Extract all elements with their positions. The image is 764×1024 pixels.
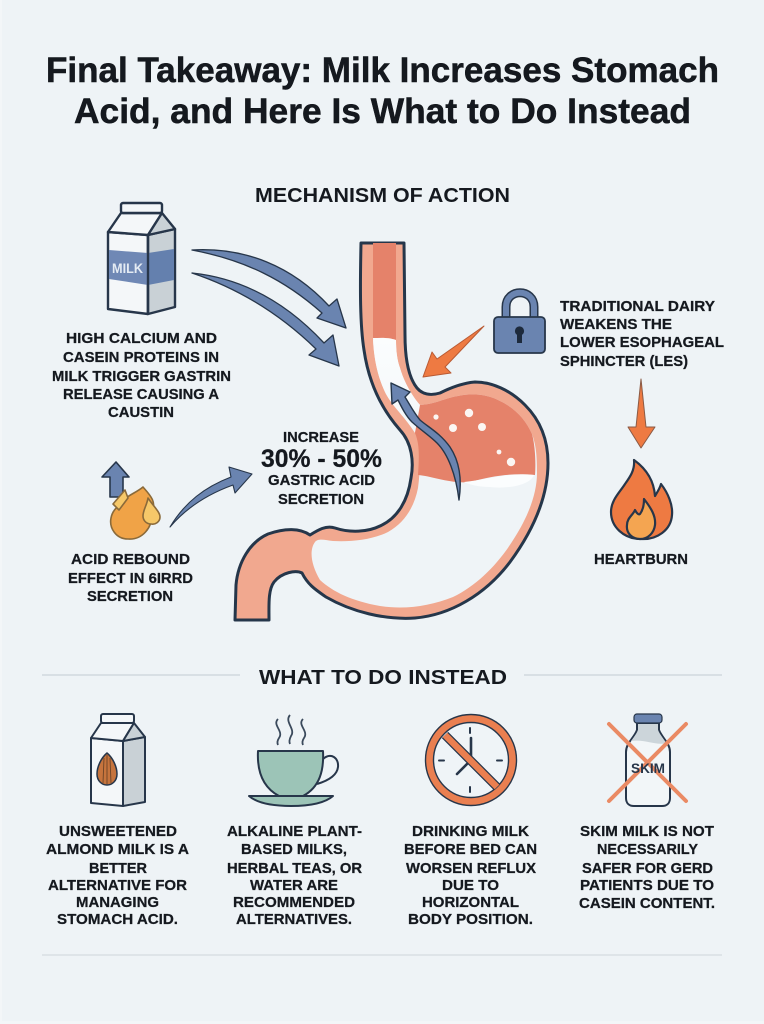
text: almond milk: ALTERNATIVE FOR: [48, 878, 187, 894]
arrow: acid rebound to increase: [170, 467, 252, 527]
icon: flame: [611, 460, 672, 539]
text: traditional dairy: WEAKENS THE: [560, 317, 672, 333]
icon: crossed-out skim bottle: [609, 714, 686, 806]
arrow: milk to stomach upper: [192, 250, 346, 328]
stomach lumen: [312, 340, 537, 608]
title: Acid, and Here Is What to Do Instead: [74, 92, 691, 131]
icon: crossed-out clock: [426, 714, 516, 806]
heading: mechanism of action: MECHANISM OF ACTION: [255, 185, 510, 207]
text: plant-based alternatives: RECOMMENDED: [233, 895, 355, 911]
text: traditional dairy: [560, 299, 724, 370]
text: traditional dairy: SPHINCTER (LES): [560, 354, 688, 370]
text: calcium and casein: CAUSTIN: [108, 405, 174, 421]
text: calcium and casein: HIGH CALCIUM AND: [66, 331, 217, 347]
icon: acid rebound: [102, 462, 160, 539]
text: acid rebound: [68, 552, 193, 605]
text: skim milk: NECESSARILY: [597, 842, 698, 858]
esophagus passage: [373, 338, 420, 433]
arrow: LES weakening: [423, 326, 484, 377]
text: calcium and casein: MILK TRIGGER GASTRIN: [52, 369, 231, 385]
gastric acid pool: [415, 394, 535, 482]
heading: what to do instead: WHAT TO DO INSTEAD: [259, 667, 507, 689]
arrow: to heartburn: [628, 379, 655, 448]
text: plant-based alternatives: BASED MILKS,: [241, 842, 347, 858]
text: drinking milk before bed: HORIZONTAL: [422, 895, 519, 911]
divider: what to do instead: [42, 674, 722, 676]
text: increase 30-50 percent: [261, 430, 382, 508]
text: plant-based alternatives: ALKALINE PLANT-: [227, 824, 362, 840]
text: skim milk: PATIENTS DUE TO: [580, 878, 714, 894]
title: [46, 51, 719, 131]
text: acid rebound: SECRETION: [87, 589, 173, 605]
text: drinking milk before bed: BEFORE BED CAN: [404, 842, 537, 858]
stomach diagram: [235, 243, 548, 620]
text: skim milk: CASEIN CONTENT.: [579, 896, 715, 912]
text: drinking milk before bed: DRINKING MILK: [412, 824, 529, 840]
text: plant-based alternatives: HERBAL TEAS, OR: [227, 861, 362, 877]
esophagus acid column: [373, 243, 396, 340]
text: drinking milk before bed: WORSEN REFLUX: [406, 861, 536, 877]
acid bubbles: [433, 409, 515, 466]
text: traditional dairy: LOWER ESOPHAGEAL: [560, 335, 724, 351]
text: plant-based alternatives: WATER ARE: [250, 878, 338, 894]
text: plant-based alternatives: ALTERNATIVES.: [236, 912, 352, 928]
icon: milk carton: MILK: [112, 261, 143, 276]
text: calcium and casein: [52, 331, 231, 421]
text: increase 30-50 percent: INCREASE: [283, 430, 359, 446]
text: skim milk: [579, 824, 715, 912]
title: Final Takeaway: Milk Increases Stomach: [46, 51, 719, 90]
text: almond milk: [46, 824, 189, 928]
icon: crossed-out skim bottle: SKIM: [631, 761, 665, 776]
text: drinking milk before bed: BODY POSITION.: [408, 912, 533, 928]
text: skim milk: SKIM MILK IS NOT: [580, 824, 714, 840]
text: traditional dairy: TRADITIONAL DAIRY: [560, 299, 715, 315]
text: almond milk: MANAGING: [76, 895, 159, 911]
icon: padlock: [494, 293, 545, 353]
text: increase 30-50 percent: SECRETION: [278, 492, 364, 508]
arrow: acid reflux: [391, 383, 460, 500]
icon: tea cup: [249, 715, 338, 806]
text: calcium and casein: RELEASE CAUSING A: [63, 387, 219, 403]
stomach wall: [235, 243, 548, 620]
icon: almond milk carton: [91, 714, 145, 806]
text: drinking milk before bed: DUE TO: [442, 878, 499, 894]
text: plant-based alternatives: [227, 824, 362, 928]
arrow: milk to stomach lower: [192, 273, 339, 366]
text: heartburn: HEARTBURN: [594, 552, 688, 568]
text: almond milk: STOMACH ACID.: [57, 912, 178, 928]
text: drinking milk before bed: [404, 824, 537, 928]
foam layer: [464, 474, 534, 488]
text: almond milk: UNSWEETENED: [59, 824, 177, 840]
text: increase 30-50 percent: GASTRIC ACID: [268, 473, 375, 489]
text: increase 30-50 percent: 30% - 50%: [261, 445, 382, 473]
text: almond milk: ALMOND MILK IS A: [46, 842, 189, 858]
text: almond milk: BETTER: [89, 861, 147, 877]
text: skim milk: SAFER FOR GERD: [582, 861, 713, 877]
text: acid rebound: ACID REBOUND: [71, 552, 190, 568]
icon: milk carton: [108, 203, 175, 314]
text: calcium and casein: CASEIN PROTEINS IN: [63, 350, 219, 366]
text: acid rebound: EFFECT IN 6IRRD: [68, 571, 193, 587]
